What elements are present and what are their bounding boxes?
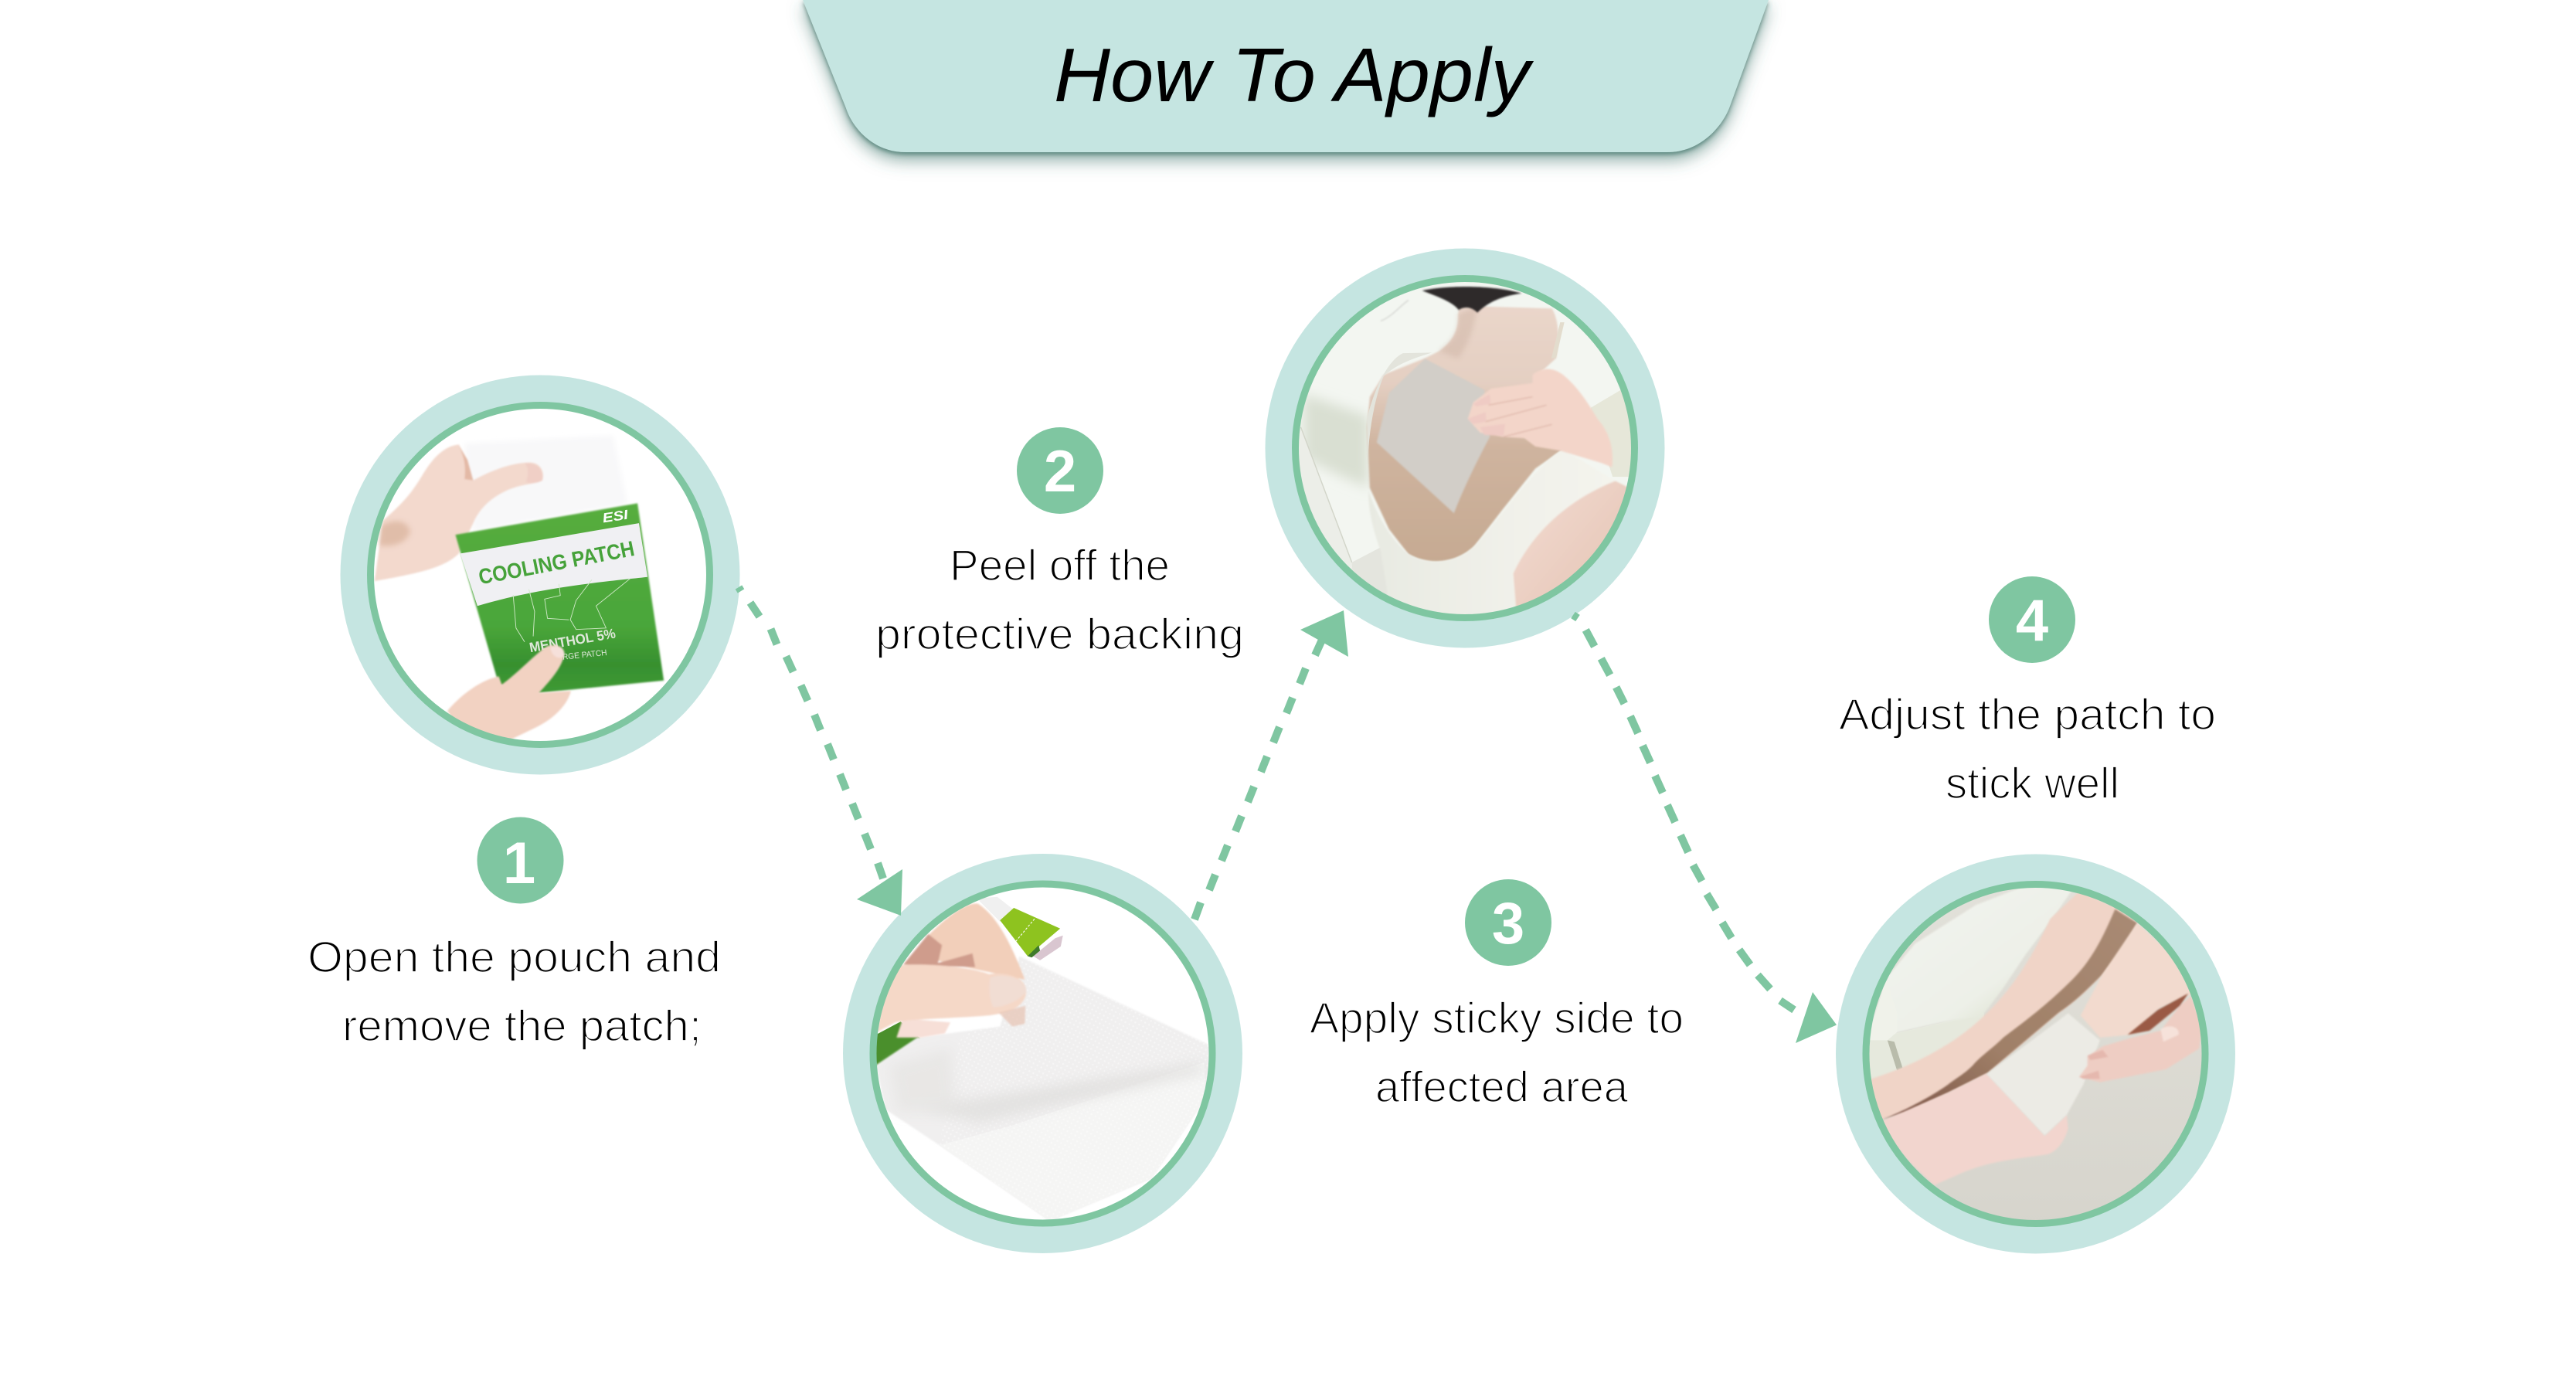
step 3 photo: patch on the shoulder <box>1266 249 1664 647</box>
sofa seat <box>1854 878 2218 1236</box>
arrow: step 1 to step 2 <box>739 587 902 916</box>
lower hand <box>447 645 571 741</box>
step 1 text: Open the pouch and <box>308 933 721 982</box>
front leg and foot <box>1881 923 2192 1185</box>
green pouch <box>455 503 664 693</box>
step 2 text: protective backing <box>875 610 1244 659</box>
applied patch <box>1986 1013 2100 1136</box>
pouch white band <box>460 523 647 606</box>
step 2 text: Peel off the <box>950 541 1170 590</box>
pink liner <box>1033 936 1063 960</box>
lime tab <box>1000 908 1060 956</box>
pouch outline drawing <box>513 579 630 642</box>
step 3 text <box>1310 994 1684 1112</box>
pouch patch label: LARGE PATCH <box>552 648 607 663</box>
neck strap <box>1551 322 1565 359</box>
arrow: step 2 to step 3 <box>1195 610 1348 919</box>
title: How To Apply <box>1054 32 1534 117</box>
step 2 photo: peeling the backing <box>843 854 1242 1253</box>
step 1 text <box>308 933 721 1051</box>
pouch menthol label: MENTHOL 5% <box>528 626 617 655</box>
step 4 photo: patch on the ankle <box>1836 855 2235 1253</box>
pouch brand: ESI <box>601 507 630 525</box>
leg shadow <box>1882 909 2137 1120</box>
step 1 text: remove the patch; <box>342 1001 702 1051</box>
hand on shoulder <box>1468 369 1613 467</box>
step 1 badge <box>477 817 564 904</box>
step 2 badge: 2 <box>1044 439 1076 505</box>
step 3 badge: 3 <box>1492 891 1524 957</box>
patch sheet <box>876 956 1211 1221</box>
step 3 text: Apply sticky side to <box>1310 994 1684 1043</box>
arrow: step 3 to step 4 <box>1573 615 1837 1043</box>
step 2 text <box>875 541 1244 659</box>
peeling hand <box>877 903 1026 1038</box>
applied patch <box>1377 359 1490 513</box>
white pouch top <box>464 436 627 532</box>
skin of back and neck <box>1367 306 1563 561</box>
tank top <box>1369 451 1561 614</box>
green pouch corner <box>876 1021 923 1066</box>
sofa base <box>1860 1013 1986 1082</box>
pouch title: COOLING PATCH <box>477 537 637 590</box>
cushion <box>1865 885 2075 1040</box>
step 1 photo: opening the pouch <box>340 376 740 774</box>
step 2 badge <box>1017 427 1103 514</box>
step 3 badge <box>1465 879 1551 966</box>
title banner <box>803 0 1769 152</box>
step 1 badge: 1 <box>503 831 535 896</box>
step 4 badge: 4 <box>2016 588 2048 654</box>
adjusting hand <box>2079 994 2202 1082</box>
upper hand <box>375 444 543 581</box>
rear leg <box>1871 892 2137 1120</box>
step 4 text: Adjust the patch to <box>1839 690 2216 739</box>
step 4 badge <box>1989 576 2075 663</box>
sofa background <box>1299 282 1629 606</box>
step 4 text: stick well <box>1946 759 2119 808</box>
right arm <box>1513 481 1627 606</box>
step 4 text <box>1839 690 2216 808</box>
step 3 text: affected area <box>1375 1062 1628 1112</box>
shoulder strap left <box>1368 352 1431 456</box>
backing strip <box>979 897 1012 921</box>
hair <box>1381 287 1521 321</box>
